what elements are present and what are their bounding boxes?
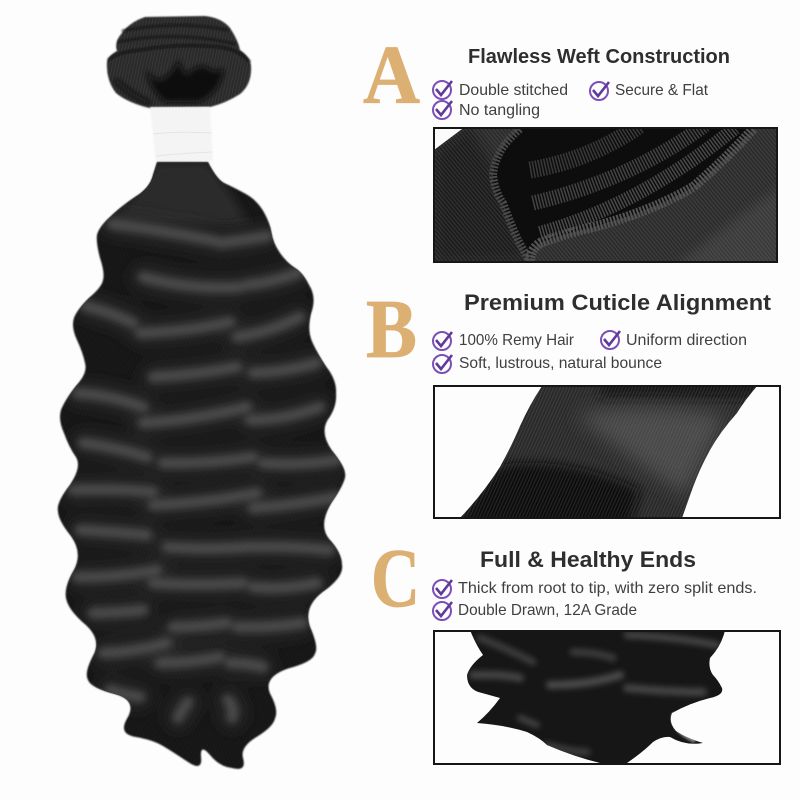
letter A: A — [363, 29, 420, 122]
weft top of bundle — [107, 16, 251, 108]
heading A: Flawless Weft Construction — [468, 46, 730, 68]
photo: weft close-up — [434, 125, 790, 270]
check item: secure and flat: Secure & Flat — [615, 82, 709, 99]
check item: soft bounce: Soft, lustrous, natural bounce — [459, 355, 662, 372]
check item: uniform direction: Uniform direction — [626, 332, 747, 349]
heading B: Premium Cuticle Alignment — [464, 290, 772, 315]
section B — [366, 283, 780, 530]
letter C: C — [371, 532, 420, 625]
check item: double stitched: Double stitched — [459, 82, 568, 99]
photo: hair ends — [434, 630, 780, 764]
check item: double drawn: Double Drawn, 12A Grade — [458, 602, 637, 619]
check item: thick root to tip: Thick from root to tip, with zero split ends. — [458, 580, 757, 597]
heading C: Full & Healthy Ends — [480, 547, 696, 572]
hair bundle product photo — [58, 16, 350, 770]
wavy hair body — [58, 160, 350, 770]
check item: remy hair: 100% Remy Hair — [459, 332, 575, 349]
letter B: B — [366, 283, 417, 376]
white band — [150, 107, 213, 162]
section A — [363, 47, 778, 263]
photo: straight cuticle hair — [433, 385, 781, 519]
check item: no tangling: No tangling — [459, 102, 540, 119]
section C — [371, 532, 780, 764]
